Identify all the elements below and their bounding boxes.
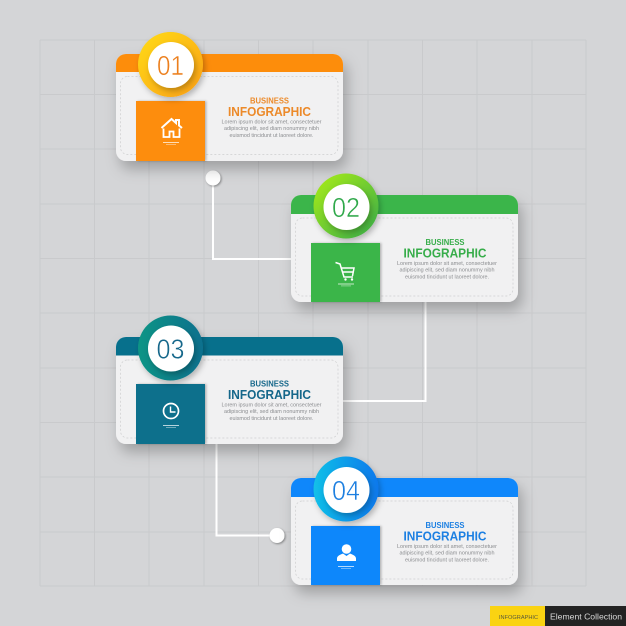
text block 03: BUSINESS	[250, 380, 290, 388]
text block 04: euismod tincidunt ut laoreet dolore.	[405, 558, 489, 564]
text block 03: adipiscing elit, sed diam nonummy nibh	[224, 409, 319, 415]
text block 03	[222, 380, 322, 422]
text block 01: adipiscing elit, sed diam nonummy nibh	[224, 126, 319, 132]
text block 04: BUSINESS	[426, 521, 465, 530]
text block 02: Lorem ipsum dolor sit amet, consectetuer	[397, 261, 497, 267]
text block 01: INFOGRAPHIC	[228, 104, 312, 119]
text block 03: INFOGRAPHIC	[228, 387, 312, 402]
icon tile: person	[311, 526, 380, 585]
text block 02: INFOGRAPHIC	[404, 246, 487, 260]
text block 02: euismod tincidunt ut laoreet dolore.	[405, 274, 489, 280]
number badge 03	[138, 316, 203, 380]
text block 03: euismod tincidunt ut laoreet dolore.	[230, 416, 314, 422]
panel: card 04	[291, 456, 518, 585]
text block 03: Lorem ipsum dolor sit amet, consectetuer	[222, 402, 322, 408]
text block 04: adipiscing elit, sed diam nonummy nibh	[400, 550, 494, 556]
text block 02: adipiscing elit, sed diam nonummy nibh	[400, 268, 494, 274]
connector 3-4	[216, 442, 284, 543]
number badge 04	[314, 456, 378, 522]
footer tag: element collection: Element Collection	[550, 612, 622, 622]
text block 01: euismod tincidunt ut laoreet dolore.	[230, 133, 314, 139]
panel: card 02	[291, 174, 518, 302]
footer tag: element collection	[545, 606, 626, 626]
connector 1-2	[206, 170, 292, 259]
footer tag: infographic	[490, 606, 545, 626]
text block 04	[397, 521, 497, 564]
number badge 02: 02	[332, 192, 360, 223]
panel: card 01	[116, 32, 343, 161]
connector 2-3	[342, 300, 426, 401]
text block 01: Lorem ipsum dolor sit amet, consectetuer	[222, 120, 322, 126]
number badge 02	[314, 174, 378, 238]
number badge 03: 03	[156, 334, 184, 364]
footer tag: infographic: INFOGRAPHIC	[499, 615, 538, 621]
text block 04: Lorem ipsum dolor sit amet, consectetuer	[397, 544, 497, 550]
number badge 04: 04	[332, 475, 360, 506]
number badge 01: 01	[157, 50, 184, 81]
text block 02	[397, 238, 497, 280]
icon tile: cart	[311, 243, 380, 302]
text block 04: INFOGRAPHIC	[404, 528, 487, 544]
text block 01: BUSINESS	[250, 96, 290, 106]
panel: card 03	[116, 316, 343, 444]
text block 02: BUSINESS	[426, 238, 465, 247]
icon tile: clock	[136, 384, 205, 444]
icon tile: home	[136, 101, 205, 161]
number badge 01	[138, 32, 203, 97]
text block 01	[222, 96, 322, 139]
